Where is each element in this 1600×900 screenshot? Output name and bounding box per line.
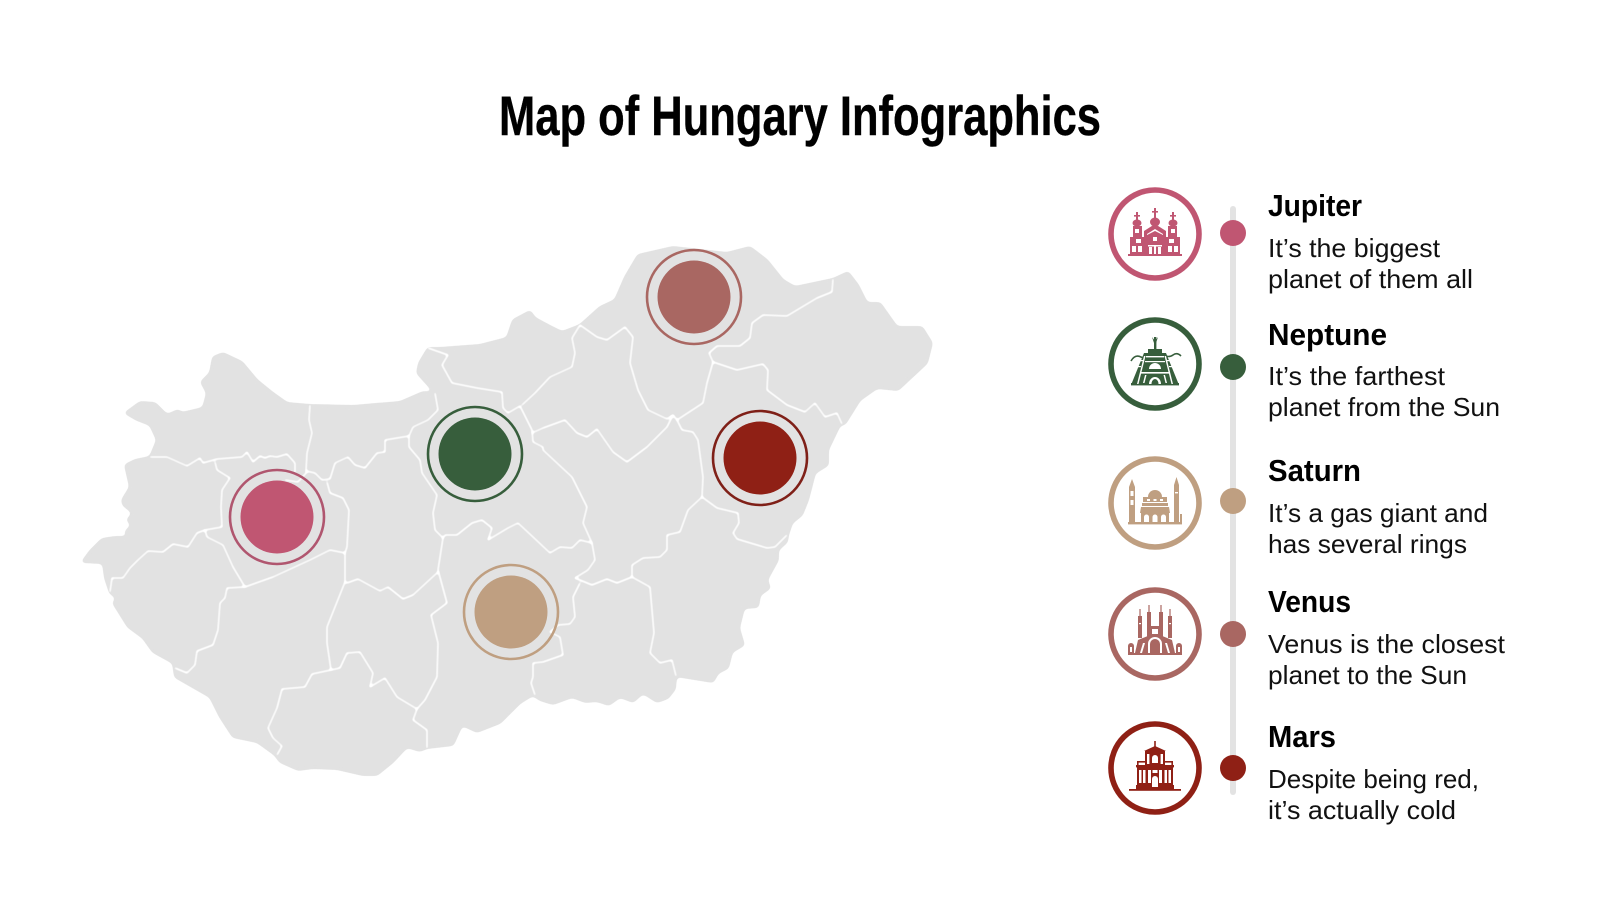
icon: monument <box>1111 320 1199 408</box>
icon: mosque <box>1111 459 1199 547</box>
icon: palace <box>1111 724 1199 812</box>
map: country silhouette <box>82 247 932 775</box>
item: Venus <box>1111 584 1506 690</box>
description: Despite being red, <box>1268 764 1479 794</box>
map of Hungary <box>82 247 932 775</box>
timeline line <box>1230 206 1236 795</box>
marker dot <box>1220 755 1246 781</box>
marker dot <box>1220 488 1246 514</box>
heading: Saturn <box>1268 453 1361 488</box>
heading: Jupiter <box>1268 188 1362 223</box>
heading: Mars <box>1268 719 1336 754</box>
title: Map of Hungary Infographics <box>499 84 1101 147</box>
description: Venus is the closest <box>1268 629 1506 659</box>
marker dot <box>1220 220 1246 246</box>
map: county borders <box>110 279 842 755</box>
marker dot <box>1220 354 1246 380</box>
item: Jupiter <box>1111 188 1473 294</box>
description: planet of them all <box>1268 264 1473 294</box>
description: it’s actually cold <box>1268 795 1456 825</box>
description: It’s the biggest <box>1268 233 1441 263</box>
icon: cathedral <box>1111 590 1199 678</box>
heading: Venus <box>1268 584 1351 619</box>
icon: church <box>1111 190 1199 278</box>
map marker: Venus <box>647 250 741 344</box>
marker dot <box>1220 621 1246 647</box>
item: Saturn <box>1111 453 1488 559</box>
item: Neptune <box>1111 317 1500 422</box>
item: Mars <box>1111 719 1479 825</box>
description: planet to the Sun <box>1268 660 1467 690</box>
heading: Neptune <box>1268 317 1387 352</box>
map marker: Neptune <box>428 407 522 501</box>
description: It’s the farthest <box>1268 361 1446 391</box>
map marker: Saturn <box>464 565 558 659</box>
map marker: Jupiter <box>230 470 324 564</box>
description: has several rings <box>1268 529 1467 559</box>
description: planet from the Sun <box>1268 392 1500 422</box>
map marker: Mars <box>713 411 807 505</box>
description: It’s a gas giant and <box>1268 498 1488 528</box>
